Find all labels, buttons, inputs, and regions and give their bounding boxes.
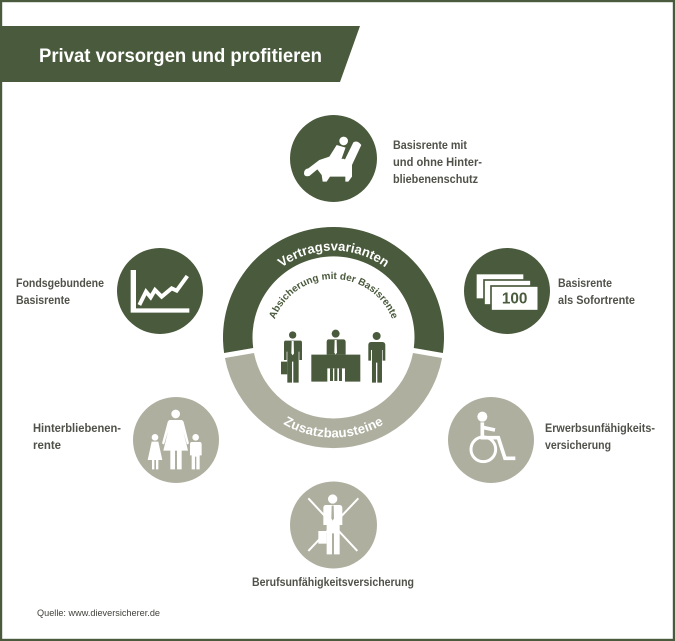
- icon: rising line chart: [117, 248, 203, 334]
- label: Basisrente: [558, 278, 612, 290]
- icon: banknotes: 100: [502, 291, 527, 308]
- item: Basisrente mit und ohne Hinterbliebenenschutz: [290, 115, 482, 202]
- icon: mother and two children: [133, 397, 219, 483]
- title banner: Privat vorsorgen und profitieren: [39, 45, 322, 67]
- item: Hinterbliebenenrente: [33, 397, 219, 483]
- item: Basisrente als Sofortrente: als Sofortrente: [558, 295, 635, 307]
- ring segment: Zusatzbausteine: [225, 353, 442, 448]
- icon: wheelchair: [448, 397, 534, 483]
- item: Basisrente mit und ohne Hinterbliebenenschutz: und ohne Hinter-: [393, 157, 482, 169]
- label: Erwerbsunfähigkeits-: [545, 423, 655, 435]
- central ring: [223, 227, 444, 448]
- source note: Quelle: www.dieversicherer.de: [37, 608, 160, 619]
- item: Fondsgebundene Basisrente: [16, 248, 203, 334]
- item: Erwerbsunfähigkeitsversicherung: versicherung: [545, 440, 611, 452]
- label: Basisrente mit: [393, 140, 467, 152]
- item: Hinterbliebenenrente: rente: [33, 440, 61, 452]
- ring segment: Zusatzbausteine: Zusatzbausteine: [283, 416, 382, 438]
- item: Basisrente mit und ohne Hinterbliebenenschutz: bliebenenschutz: [393, 174, 478, 186]
- title banner: [0, 26, 360, 82]
- label: Berufsunfähigkeitsversicherung: [252, 577, 414, 589]
- item: Basisrente als Sofortrente: [464, 248, 635, 334]
- inner heading: Absicherung mit der Basisrente: [270, 272, 396, 320]
- icon: crossed-out businessman: [290, 482, 377, 568]
- item: Fondsgebundene Basisrente: Basisrente: [16, 295, 70, 307]
- item: Erwerbsunfähigkeitsversicherung: [448, 397, 655, 483]
- label: Hinterbliebenen-: [33, 423, 121, 435]
- icon: banknotes: [464, 248, 550, 334]
- icon: three people at a desk: [281, 330, 385, 383]
- label: Fondsgebundene: [16, 278, 104, 290]
- ring segment: Vertragsvarianten: [223, 227, 444, 353]
- icon: reclining chair: [290, 115, 377, 202]
- ring segment: Vertragsvarianten: Vertragsvarianten: [276, 243, 388, 267]
- item: Berufsunfähigkeitsversicherung: [252, 482, 414, 589]
